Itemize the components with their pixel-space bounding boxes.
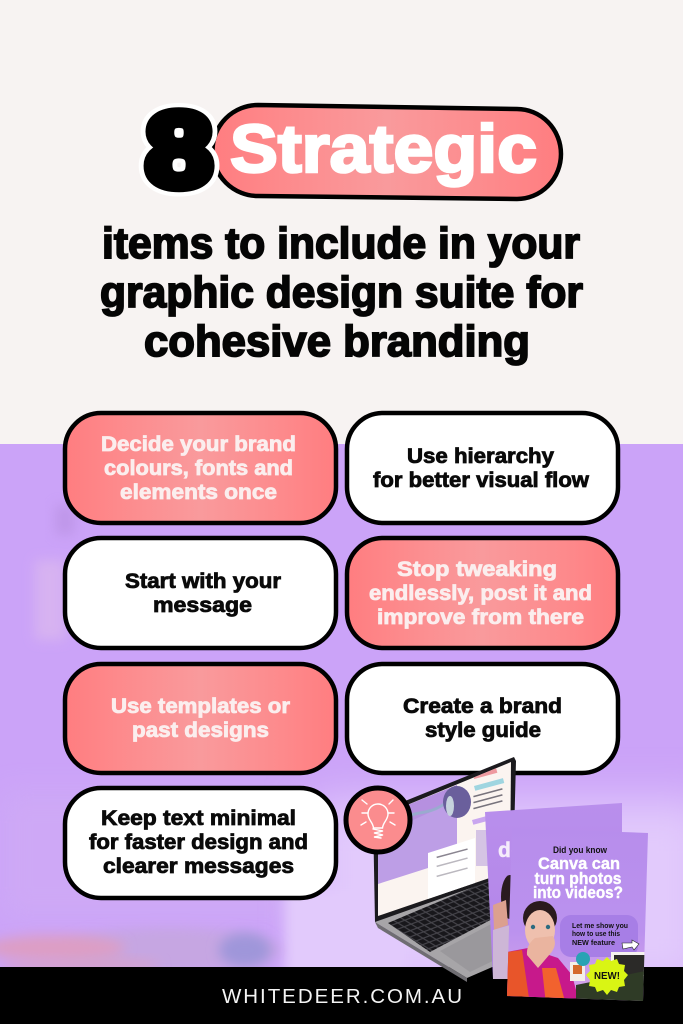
- card 7: minimal text: [65, 788, 336, 898]
- card 3: start with message: message: [153, 594, 252, 617]
- card 5: templates: past designs: [132, 719, 269, 742]
- icon: lightbulb badge: [346, 788, 410, 852]
- NEW badge: NEW!: [594, 971, 620, 982]
- subtitle: cohesive branding: [144, 317, 530, 366]
- card 3: start with message: [65, 538, 336, 648]
- subtitle: graphic design suite for: [100, 268, 583, 317]
- footer url: WHITEDEER.COM.AU: [222, 985, 462, 1008]
- person: [507, 901, 578, 999]
- poster headline: Canva can: [538, 854, 620, 873]
- pill: Strategic: Strategic: [230, 111, 537, 187]
- title: 8 Strategic: [146, 91, 561, 208]
- card 6: style guide: [347, 664, 618, 773]
- card 6: style guide: style guide: [425, 719, 541, 742]
- card 1: decide brand: [65, 413, 336, 523]
- poster back: de: [498, 839, 523, 862]
- poster front: [504, 828, 651, 1005]
- poster bubble text: Let me show you: [572, 921, 628, 930]
- card 4: stop tweaking: Stop tweaking: [397, 558, 557, 581]
- laptop mockup: [370, 755, 520, 982]
- poster bubble text: how to use this: [572, 929, 620, 938]
- card 5: templates: [65, 664, 336, 773]
- card 4: stop tweaking: endlessly, post it and: [369, 582, 592, 605]
- NEW badge: [586, 957, 628, 995]
- background: [0, 444, 683, 967]
- card 6: style guide: Create a brand: [403, 695, 562, 718]
- arrow sticker: [622, 940, 639, 950]
- card 1: decide brand: Decide your brand: [101, 433, 296, 456]
- poster headline: [533, 845, 623, 902]
- card 1: decide brand: elements once: [120, 481, 277, 504]
- card 7: minimal text: clearer messages: [103, 855, 294, 878]
- photo cards: [611, 952, 644, 976]
- numeral 8: 8: [146, 91, 212, 208]
- card 4: stop tweaking: improve from there: [377, 606, 584, 629]
- card 5: templates: Use templates or: [111, 695, 290, 718]
- card 7: minimal text: for faster design and: [89, 831, 308, 854]
- keyboard: [388, 880, 496, 952]
- poster bubble text: NEW feature: [572, 938, 615, 947]
- card 1: decide brand: colours, fonts and: [104, 457, 293, 480]
- subtitle: items to include in your: [102, 219, 580, 268]
- card 4: stop tweaking: [347, 538, 618, 648]
- card 2: hierarchy: [347, 413, 618, 523]
- footer bar: [0, 967, 683, 1024]
- laptop base: [375, 874, 520, 978]
- card 7: minimal text: Keep text minimal: [101, 807, 296, 830]
- poster headline: Did you know: [553, 845, 608, 856]
- poster headline: turn photos: [534, 869, 622, 888]
- numeral 8: 8: [146, 91, 212, 208]
- subtitle: [100, 219, 583, 366]
- speech bubble: [560, 915, 638, 957]
- card 3: start with message: Start with your: [125, 570, 281, 593]
- card 2: hierarchy: Use hierarchy: [407, 445, 554, 468]
- laptop screen: [370, 755, 520, 925]
- poster back: [485, 803, 622, 979]
- poster headline: into videos?: [533, 883, 623, 902]
- poster bubble text: [572, 921, 628, 947]
- card 2: hierarchy: for better visual flow: [373, 469, 590, 492]
- pill: Strategic: [213, 105, 561, 199]
